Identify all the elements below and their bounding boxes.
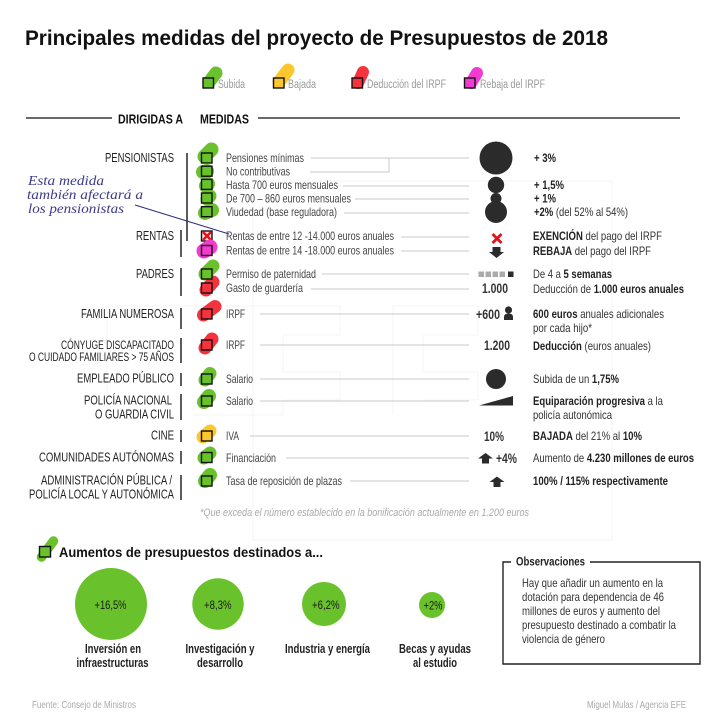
body text: violencia de género (522, 632, 605, 646)
group: policia nacional: policía autonómica (533, 408, 612, 422)
bubble: becas (419, 592, 445, 618)
group: policia nacional: O GUARDIA CIVIL (95, 408, 174, 422)
group: familia numerosa: 600 euros anuales adicionales (533, 307, 664, 321)
group: cine (151, 428, 642, 444)
group: pensionistas: No contributivas (226, 164, 290, 178)
group: administracion publica: POLICÍA LOCAL Y AUTONÓMICA (29, 486, 174, 502)
label: becas: Becas y ayudas (399, 642, 471, 656)
icon: green marker (40, 541, 54, 557)
legend item: rebaja del IRPF (464, 73, 545, 91)
label: investigacion: Investigación y (186, 642, 255, 656)
bubble: industria: +6,2% (312, 598, 340, 612)
column header: DIRIGIDAS A (118, 112, 183, 126)
legend item: subida: Subida (218, 79, 245, 91)
leader lines (250, 158, 469, 481)
group: administracion publica: Tasa de reposición de plazas (226, 474, 342, 488)
group: padres: Permiso de paternidad (226, 267, 316, 281)
group: pensionistas: De 700 – 860 euros mensuales (226, 192, 351, 206)
group: rentas: EXENCIÓN del pago del IRPF (533, 228, 662, 243)
column header (26, 112, 680, 126)
group: conyuge discapacitado (29, 338, 651, 364)
label: investigacion: desarrollo (197, 656, 243, 670)
group: rentas: Rentas de entre 12 -14.000 euros anuales (226, 229, 394, 243)
group: familia numerosa: IRPF (226, 307, 245, 321)
body text: Hay que añadir un aumento en la (522, 576, 663, 590)
group: administracion publica (29, 472, 668, 502)
group: cine: 10% (484, 429, 504, 444)
annotation: handwritten note: también afectará a (27, 188, 143, 203)
panel: aumentos de presupuestos (40, 541, 471, 670)
group: padres: Gasto de guardería (226, 281, 303, 295)
bubble: investigacion: +8,3% (204, 598, 232, 612)
icon: person (504, 306, 513, 320)
group: padres: De 4 a 5 semanas (533, 267, 612, 281)
label: inversion: infraestructuras (76, 656, 149, 670)
group: empleado publico: EMPLEADO PÚBLICO (77, 370, 174, 386)
group: policia nacional: Salario (226, 394, 253, 408)
group: pensionistas: PENSIONISTAS (105, 151, 174, 165)
group: rentas: REBAJA del pago del IRPF (533, 244, 651, 258)
legend item: deduccion del IRPF: Deducción del IRPF (367, 79, 446, 91)
group: conyuge discapacitado: CÓNYUGE DISCAPACITADO (61, 339, 174, 352)
label: industria: Industria y energía (285, 642, 371, 656)
group: rentas: Rentas de entre 14 -18.000 euros anuales (226, 244, 394, 258)
group: pensionistas: + 3% (534, 151, 556, 165)
group: rentas: RENTAS (136, 229, 174, 243)
bubble: infraestructuras (75, 568, 147, 640)
group: pensionistas: + 1% (534, 192, 556, 206)
group: comunidades autonomas: Financiación (226, 451, 276, 465)
group: rentas (136, 228, 662, 258)
body text: presupuesto destinado a combatir la (522, 618, 676, 632)
group: comunidades autonomas: +4% (496, 451, 517, 466)
group: pensionistas: Viudedad (base reguladora) (226, 205, 337, 219)
legend item: bajada: Bajada (288, 79, 316, 91)
legend item: bajada (274, 70, 316, 91)
heading: observaciones: Observaciones (516, 554, 585, 568)
group: pensionistas: Pensiones mínimas (226, 151, 304, 165)
group: conyuge discapacitado: O CUIDADO FAMILIARES > 75 AÑOS (29, 351, 174, 364)
group: familia numerosa: FAMILIA NUMEROSA (81, 307, 174, 321)
group: empleado publico (77, 369, 619, 389)
credit: Miguel Mulas / Agencia EFE (587, 699, 686, 711)
group: administracion publica: 100% / 115% respectivamente (533, 474, 668, 488)
bubble: industria (302, 582, 346, 626)
group: policia nacional: POLICÍA NACIONAL (84, 392, 172, 408)
body text: dotación para dependencia de 46 (522, 590, 664, 604)
group: padres: 1.000 (482, 281, 508, 296)
group: familia numerosa: por cada hijo* (533, 321, 592, 335)
group: familia numerosa: +600 (476, 307, 500, 322)
annotation: handwritten note (27, 174, 229, 234)
group: policia nacional: Equiparación progresiva a la (533, 394, 663, 408)
group: cine: BAJADA del 21% al 10% (533, 429, 642, 443)
legend item: deduccion del IRPF (352, 72, 446, 91)
group: comunidades autonomas: Aumento de 4.230 millones de euros (533, 451, 694, 465)
group: cine: CINE (151, 428, 174, 442)
title: Principales medidas del proyecto de Presupuestos de 2018 (25, 26, 608, 50)
group: conyuge discapacitado: IRPF (226, 338, 245, 352)
group: familia numerosa (81, 306, 664, 335)
legend item: subida (203, 73, 245, 91)
heading: Aumentos de presupuestos destinados a... (59, 544, 323, 560)
label: becas: al estudio (413, 656, 457, 670)
body text: millones de euros y aumento del (522, 604, 660, 618)
annotation: handwritten note: Esta medida (27, 174, 104, 189)
source: Fuente: Consejo de Ministros (32, 699, 136, 711)
group: comunidades autonomas (39, 450, 694, 466)
legend item: rebaja del IRPF: Rebaja del IRPF (480, 79, 545, 91)
body text (522, 576, 676, 646)
group: pensionistas: +2% (del 52% al 54%) (534, 205, 628, 219)
label: becas (399, 642, 471, 670)
column header: MEDIDAS (200, 112, 249, 126)
footnote: *Que exceda el número establecido en la bonificación actualmente en 1.200 euros (200, 507, 529, 519)
bubble: investigacion (192, 578, 244, 630)
group: empleado publico: Salario (226, 372, 253, 386)
label: investigacion (186, 642, 255, 670)
group: padres: Deducción de 1.000 euros anuales (533, 282, 684, 296)
annotation: handwritten note: los pensionistas (28, 202, 125, 217)
group: pensionistas (105, 142, 628, 241)
panel: observaciones (503, 554, 700, 664)
label: inversion (76, 642, 149, 670)
bubble: becas: +2% (424, 598, 443, 612)
legend (203, 70, 545, 91)
group: administracion publica: ADMINISTRACIÓN PÚBLICA / (41, 472, 172, 488)
group: padres: PADRES (136, 267, 174, 281)
group: empleado publico: Subida de un 1,75% (533, 372, 619, 386)
group: pensionistas: Hasta 700 euros mensuales (226, 178, 338, 192)
group: comunidades autonomas: COMUNIDADES AUTÓNOMAS (39, 450, 174, 464)
group: policia nacional (84, 392, 663, 422)
label: inversion: Inversión en (85, 642, 141, 656)
group: conyuge discapacitado: 1.200 (484, 338, 510, 353)
group: conyuge discapacitado: Deducción (euros anuales) (533, 339, 651, 353)
group: cine: IVA (226, 429, 239, 443)
bubble: infraestructuras: +16,5% (94, 598, 127, 612)
group: pensionistas: + 1,5% (534, 178, 564, 192)
group: padres (136, 266, 684, 296)
